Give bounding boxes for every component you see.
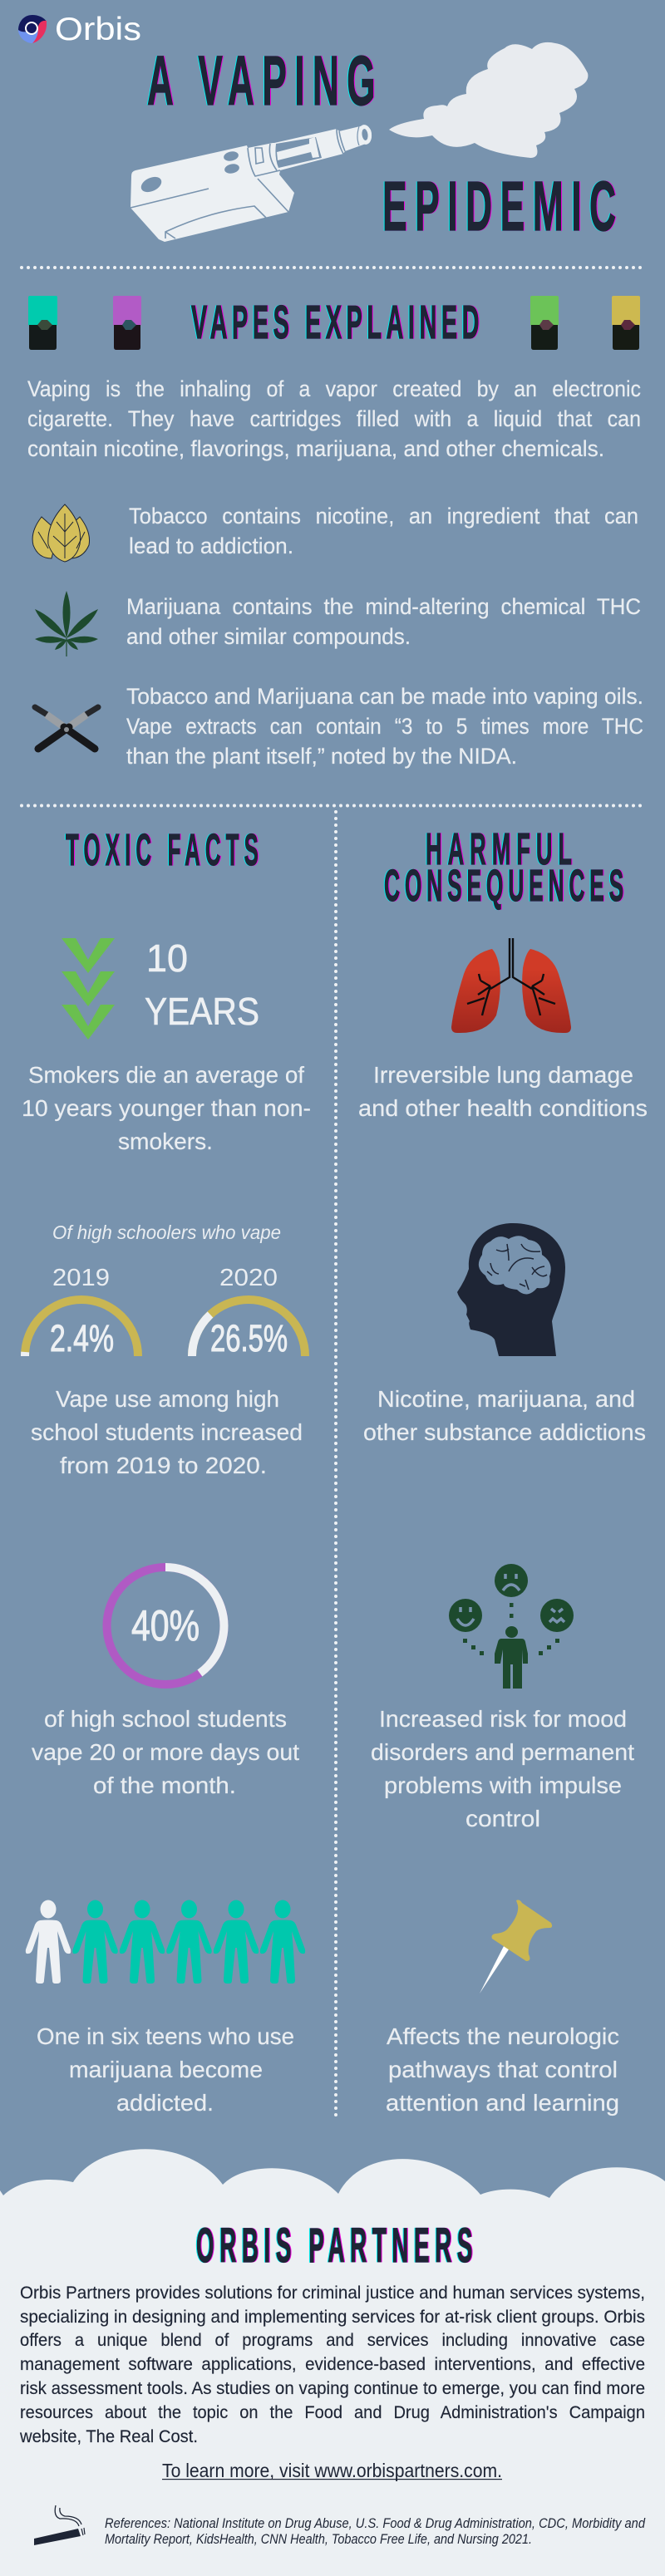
stat: 10 years: YEARS xyxy=(145,990,259,1033)
icon: purple vape pod xyxy=(113,296,141,350)
text: marijuana: Marijuana contains the mind-altering chemical THC xyxy=(126,594,641,619)
gauge: 2020: 2020 xyxy=(219,1265,278,1291)
stat: 10 years xyxy=(145,937,259,1033)
text: about Orbis xyxy=(19,2283,645,2446)
text: 40% of students: of the month. xyxy=(93,1772,236,1798)
text: marijuana: and other similar compounds. xyxy=(126,624,411,649)
text: vaping definition: Vaping is the inhaling of a vapor created by an electronic xyxy=(27,376,641,401)
text: mood disorders xyxy=(371,1706,634,1831)
heading: Harmful Consequences xyxy=(384,824,628,911)
icon: cigarette xyxy=(34,2505,85,2545)
donut chart: 40% xyxy=(106,1567,224,1684)
icon: person with moods xyxy=(449,1564,574,1689)
text: tobacco: lead to addiction. xyxy=(129,533,293,558)
icon: vape device xyxy=(131,124,373,242)
gauge: 2020: 26.5% xyxy=(210,1317,288,1359)
gauge: 2019: 2.4% xyxy=(50,1317,114,1359)
text: vaping definition: contain nicotine, flavorings, marijuana, and other chemicals. xyxy=(27,436,604,461)
text: vaping definition xyxy=(27,376,641,461)
text: about Orbis: Orbis Partners provides solutions for criminal justice and human services systems, xyxy=(20,2283,645,2303)
icon: lungs xyxy=(451,938,571,1033)
text: vaping definition: cigarette. They have cartridges filled with a liquid that can xyxy=(27,406,641,431)
text: vape use xyxy=(31,1386,303,1478)
text: tobacco: Tobacco contains nicotine, an ingredient that can xyxy=(129,504,638,528)
text: neurologic pathways: attention and learning xyxy=(386,2090,619,2116)
icon: green vape pod xyxy=(530,296,559,350)
text: mood disorders: control xyxy=(466,1806,540,1831)
text: references xyxy=(105,2515,645,2547)
text: 40% of students: vape 20 or more days out xyxy=(32,1739,299,1765)
text: smokers die xyxy=(22,1062,311,1154)
text: lung damage: Irreversible lung damage xyxy=(373,1062,633,1088)
text: smokers die: Smokers die an average of xyxy=(28,1062,304,1088)
text: one in six teens: marijuana become xyxy=(69,2057,263,2082)
icon: down chevrons xyxy=(62,938,115,1040)
text: vape use: Vape use among high xyxy=(56,1386,279,1412)
text: vaping oils: than the plant itself,” noted by the NIDA. xyxy=(126,744,517,769)
text: smokers die: smokers. xyxy=(118,1128,213,1154)
text: about Orbis: management software applications, evidence-based interventions, and effective xyxy=(20,2354,645,2374)
gauge: 2019: 2019 xyxy=(52,1265,110,1291)
text: mood disorders: disorders and permanent xyxy=(371,1739,634,1765)
icon: crossed vape pens xyxy=(35,707,98,749)
text: lung damage: and other health conditions xyxy=(358,1095,648,1121)
text: references: Mortality Report, KidsHealth, CNN Health, Tobacco Free Life, and Nursing 2021. xyxy=(105,2531,532,2547)
gauge: 2019 xyxy=(25,1265,138,1359)
text: addictions: other substance addictions xyxy=(363,1419,646,1445)
panel: footer cloud xyxy=(0,2149,665,2576)
logo: Orbis: Orbis xyxy=(55,12,141,47)
text: one in six teens xyxy=(37,2023,294,2116)
text: marijuana xyxy=(126,594,641,649)
text: one in six teens: addicted. xyxy=(116,2090,214,2116)
title: A Vaping: A VAPING xyxy=(147,42,383,120)
text: about Orbis: specializing in designing and implementing services for at-risk client groups. Orbis xyxy=(20,2307,645,2327)
text: neurologic pathways xyxy=(386,2023,619,2116)
text: vape use: from 2019 to 2020. xyxy=(60,1453,267,1478)
logo: Orbis xyxy=(18,12,141,47)
text: about Orbis: website, The Real Cost. xyxy=(19,2426,198,2446)
text: tobacco xyxy=(129,504,638,558)
text: neurologic pathways: Affects the neurologic xyxy=(387,2023,619,2049)
icon: tobacco leaves xyxy=(32,504,90,562)
text: mood disorders: problems with impulse xyxy=(384,1772,622,1798)
icon: cannabis leaf xyxy=(35,591,98,656)
text: 40% of students: of high school students xyxy=(44,1706,287,1732)
link: learn more: To learn more, visit www.orbispartners.com. xyxy=(162,2460,502,2481)
icon: vapor cloud xyxy=(389,42,588,158)
text: vaping oils xyxy=(126,684,643,769)
text: addictions: Nicotine, marijuana, and xyxy=(377,1386,635,1412)
icon: teal vape pod xyxy=(28,296,57,350)
gauge: 2020 xyxy=(192,1265,305,1359)
text: of high schoolers who vape: Of high schoolers who vape xyxy=(52,1222,281,1243)
text: about Orbis: risk assessment tools. As studies on vaping continue to emerge, you can find more xyxy=(20,2378,645,2398)
donut chart: 40%: 40% xyxy=(131,1602,200,1650)
text: one in six teens: One in six teens who use xyxy=(37,2023,294,2049)
text: vape use: school students increased xyxy=(31,1419,303,1445)
text: lung damage xyxy=(358,1062,648,1121)
text: 40% of students xyxy=(32,1706,299,1798)
text: addictions xyxy=(363,1386,646,1445)
text: vaping oils: Tobacco and Marijuana can be made into vaping oils. xyxy=(126,684,643,709)
icon: one in six people xyxy=(26,1900,305,1984)
stat: 10 years: 10 xyxy=(146,937,188,980)
icon: head with brain xyxy=(457,1223,565,1356)
text: TOXIC FACTS xyxy=(66,825,264,875)
icon: yellow vape pod xyxy=(612,296,640,350)
text: mood disorders: Increased risk for mood xyxy=(379,1706,627,1732)
text: neurologic pathways: pathways that control xyxy=(388,2057,618,2082)
icon: push pin xyxy=(480,1900,552,1993)
text: smokers die: 10 years younger than non- xyxy=(22,1095,311,1121)
